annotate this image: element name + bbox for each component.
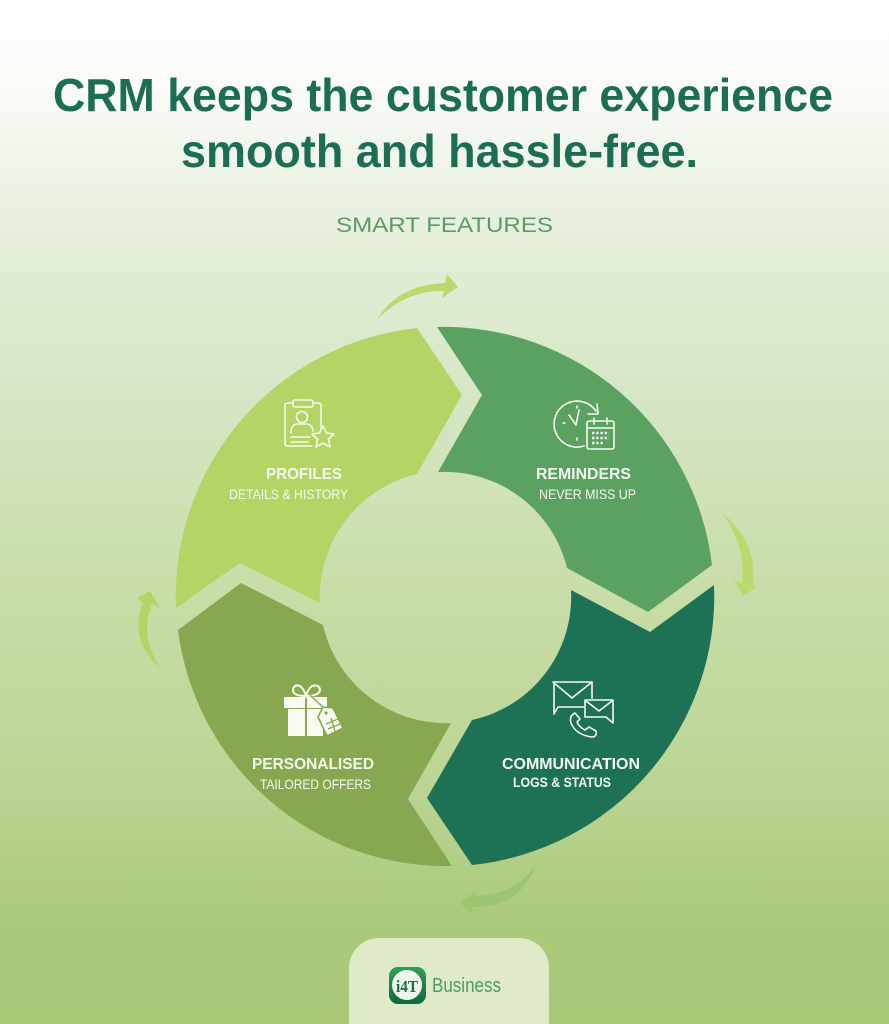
icon: envelopes and phone [553,682,613,737]
panel: reminders [437,327,712,612]
arrow: top [377,274,458,320]
sublabel: logs and status: LOGS & STATUS [513,774,611,790]
icon: profile clipboard with star [285,400,334,447]
label: reminders: REMINDERS [536,466,631,483]
icon: gift with tag [284,685,343,736]
icon: clock and calendar [554,401,614,449]
sublabel: tailored offers: TAILORED OFFERS [260,776,371,792]
title [53,69,833,177]
sublabel: details and history: DETAILS & HISTORY [229,486,349,502]
footer: logo pill [349,938,549,1024]
panel: profiles [176,328,462,608]
title: smooth and hassle-free. [181,125,698,177]
logo wordmark: Business [432,975,501,997]
arrow: right [722,513,756,595]
icon: i4T logo [389,967,426,1004]
label: profiles: PROFILES [266,466,342,483]
panel: communication [427,585,714,865]
segment: profiles [176,328,462,608]
panel: personalised [178,583,452,866]
sublabel: never miss up: NEVER MISS UP [539,486,636,502]
icon: i4T logo: i4T [396,977,419,996]
segment: communication [427,585,714,865]
label: communication: COMMUNICATION [502,756,640,773]
label: personalised: PERSONALISED [252,756,374,773]
arrow: left [137,591,160,668]
title: CRM keeps the customer experience [53,69,833,121]
subtitle: smart features: SMART FEATURES [336,214,553,237]
segment: personalised [178,583,452,866]
segment: reminders [437,327,712,612]
arrow: bottom [460,865,536,914]
